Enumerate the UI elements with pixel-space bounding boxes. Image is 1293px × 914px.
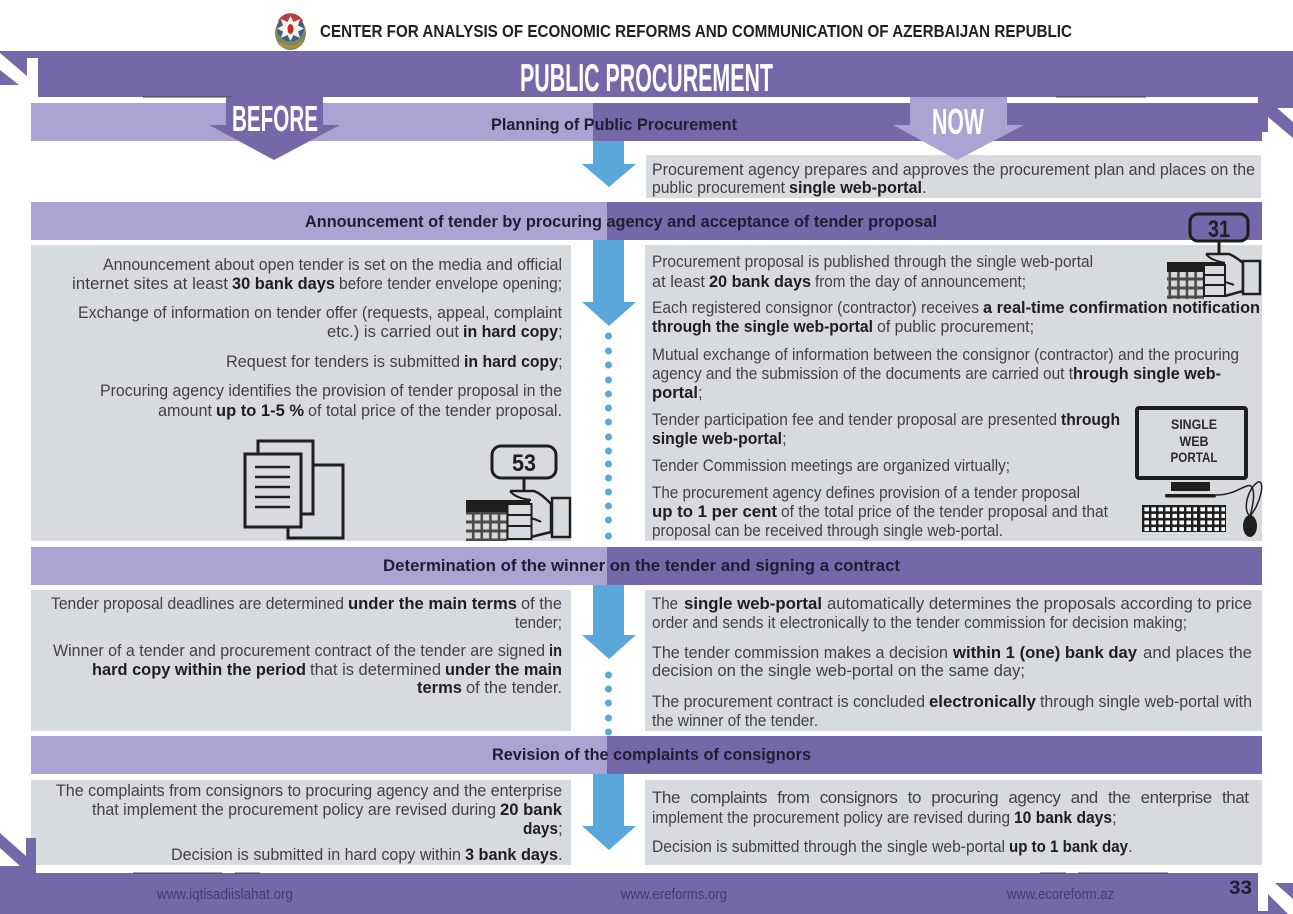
panel: announcement, now: Each registered consignor (contractor) receives — [652, 298, 979, 317]
panel: winner, now: and places the — [1143, 643, 1252, 662]
panel: announcement, now: through — [1061, 410, 1120, 429]
footer link: ereforms: www.ereforms.org — [620, 886, 727, 903]
panel: announcement, before — [31, 245, 571, 541]
panel: complaints, before: 20 bank — [500, 800, 563, 819]
panel: winner, before — [31, 590, 571, 731]
section bar: planning — [31, 103, 1262, 141]
panel: complaints, now — [645, 780, 1262, 865]
panel: announcement, before: Procuring agency identifies the provision of tender proposal in the — [100, 381, 562, 400]
section bar: announcement: Announcement of tender by procuring agency and acceptance of tender proposal — [305, 212, 937, 231]
panel: announcement, now — [645, 214, 1262, 541]
panel: announcement, now: portal — [652, 383, 698, 402]
panel: announcement, before: Request for tenders is submitted — [226, 352, 460, 371]
panel: announcement, now: through the single web-portal — [652, 317, 873, 336]
icon: computer labelled single web portal: PORTAL — [1170, 449, 1218, 465]
section bar: revision of complaints: Revision of the complaints of consignors — [492, 745, 811, 764]
corner mark: top right — [1258, 97, 1293, 138]
header: emblem and organisation name — [275, 13, 1072, 50]
panel: announcement, now: The procurement agency defines provision of a tender proposal — [652, 483, 1080, 502]
panel: complaints, before: The complaints from consignors to procuring agency and the enterprise — [56, 781, 562, 800]
panel: announcement, before: ; — [558, 352, 563, 371]
panel: announcement, now: Mutual exchange of information between the consignor (contractor) and the procuring — [652, 345, 1239, 364]
panel: winner, now: order and sends it electronically to the tender commission for decision making; — [652, 613, 1187, 632]
NOW arrow — [893, 97, 1024, 160]
section bar: determination of the winner — [31, 547, 1262, 585]
panel: complaints, now: . — [1128, 837, 1133, 856]
main title: PUBLIC PROCUREMENT — [520, 57, 773, 100]
panel: announcement, now: Tender participation fee and tender proposal are presented — [652, 410, 1057, 429]
panel: winner, now: electronically — [929, 692, 1037, 711]
icon: calendar and hand, 31 days — [1167, 214, 1260, 299]
blue arrow: planning — [582, 141, 636, 187]
panel: announcement, before: Announcement about open tender is set on the media and official — [103, 255, 562, 274]
panel: winner, before: terms — [417, 678, 462, 697]
corner mark: bottom right — [1258, 873, 1293, 914]
BEFORE arrow — [209, 97, 340, 160]
panel: winner, now: decision on the single web-portal on the same day; — [652, 661, 1025, 680]
panel: winner, now: The — [652, 594, 678, 613]
icon: computer labelled single web portal: WEB — [1180, 433, 1208, 449]
panel: announcement, now: 20 bank days — [709, 272, 811, 291]
panel: winner, before: Winner of a tender and procurement contract of the tender are signed — [53, 641, 545, 660]
panel: complaints, now: implement the procurement policy are revised during — [652, 808, 1010, 827]
panel: complaints, now: 10 bank days — [1014, 808, 1112, 827]
blue arrow: announcement — [582, 240, 636, 326]
panel: announcement, before: of total price of the tender proposal. — [308, 401, 562, 420]
panel: winner, now: automatically determines the proposals according to price — [827, 594, 1252, 613]
section bar: revision of complaints — [31, 736, 1262, 774]
panel: announcement, before: amount — [158, 401, 212, 420]
panel: announcement, now: from the day of announcement; — [815, 272, 1026, 291]
panel: announcement, before: in hard copy — [463, 322, 559, 341]
icon: calendar and hand, 53 days: 53 — [512, 450, 536, 477]
footer link: ecoreform: www.ecoreform.az — [1006, 886, 1114, 903]
panel: announcement, now: agency and the submission of the documents are carried out t — [652, 364, 1073, 383]
panel: announcement, now: up to 1 per cent — [652, 502, 777, 521]
panel: winner, before: of the — [521, 594, 562, 613]
panel: announcement, before: in hard copy — [464, 352, 558, 371]
dotted connector: winner — [605, 672, 612, 736]
icon: calendar and hand, 53 days — [466, 446, 570, 541]
panel: planning, now: public procurement — [652, 178, 785, 197]
page number: 33 — [1229, 878, 1252, 899]
panel: announcement, now: Tender Commission meetings are organized virtually; — [652, 456, 1010, 475]
NOW arrow: NOW — [932, 101, 984, 142]
panel: announcement, now: of public procurement; — [877, 317, 1034, 336]
BEFORE arrow: BEFORE — [232, 98, 318, 139]
panel: announcement, before: before tender envelope opening; — [339, 274, 562, 293]
panel: announcement, now: proposal can be received through single web-portal. — [652, 521, 1003, 540]
panel: announcement, now: hrough single web- — [1073, 364, 1221, 383]
panel: winner, before: that is determined — [310, 660, 441, 679]
blue arrow: complaints — [582, 774, 636, 850]
panel: planning, now — [646, 155, 1261, 198]
title banner — [0, 51, 1293, 100]
panel: announcement, before: internet sites at least — [72, 274, 228, 293]
panel: complaints, now: The complaints from consignors to procuring agency and the enterprise that — [652, 788, 1249, 807]
footer band — [0, 833, 1293, 914]
panel: complaints, now: up to 1 bank day — [1009, 837, 1128, 856]
panel: announcement, before: Exchange of information on tender offer (requests, appeal, complaint — [78, 303, 562, 322]
panel: announcement, now: ; — [782, 429, 787, 448]
panel: announcement, before: 30 bank days — [232, 274, 335, 293]
section bar: planning: Planning of Public Procurement — [491, 115, 737, 134]
panel: planning, now: Procurement agency prepares and approves the procurement plan and places on the — [652, 160, 1255, 179]
panel: winner, now: the winner of the tender. — [652, 711, 818, 730]
blue arrow: winner — [582, 585, 636, 659]
icon: calendar and hand, 31 days: 31 — [1208, 216, 1230, 243]
panel: planning, now: single web-portal — [789, 178, 922, 197]
panel: winner, before: tender; — [515, 613, 562, 632]
panel: complaints, before: that implement the procurement policy are revised during — [92, 800, 496, 819]
panel: winner, before: under the main — [445, 660, 562, 679]
panel: complaints, before: ; — [558, 819, 563, 838]
dotted connector: announcement — [605, 332, 612, 540]
corner mark: bottom left — [0, 833, 36, 874]
panel: announcement, now: Procurement proposal is published through the single web-portal — [652, 252, 1093, 271]
corner mark: top left — [0, 51, 38, 97]
panel: announcement, before: etc.) is carried out — [327, 322, 459, 341]
panel: announcement, now: at least — [652, 272, 705, 291]
panel: announcement, now: of the total price of the tender proposal and that — [781, 502, 1108, 521]
panel: announcement, now: a real-time confirmation notification — [983, 298, 1260, 317]
icon: computer labelled single web portal: SINGLE — [1171, 416, 1217, 432]
panel: winner, before: Tender proposal deadlines are determined — [51, 594, 344, 613]
panel: announcement, before: up to 1-5 % — [216, 401, 304, 420]
panel: winner, now: The tender commission makes a decision — [652, 643, 948, 662]
panel: winner, now: within 1 (one) bank day — [952, 643, 1138, 662]
icon: computer labelled single web portal — [1137, 408, 1262, 537]
panel: winner, now — [645, 590, 1262, 731]
panel: complaints, before: . — [558, 845, 563, 864]
panel: complaints, before — [31, 780, 571, 865]
panel: winner, before: of the tender. — [466, 678, 562, 697]
section bar: announcement — [31, 202, 1262, 240]
panel: winner, before: under the main terms — [348, 594, 517, 613]
panel: winner, now: single web-portal — [684, 594, 822, 613]
panel: winner, before: hard copy within the period — [92, 660, 306, 679]
panel: winner, before: in — [549, 641, 562, 660]
panel: complaints, now: ; — [1112, 808, 1117, 827]
panel: complaints, before: Decision is submitted in hard copy within — [171, 845, 461, 864]
panel: complaints, now: Decision is submitted through the single web-portal — [652, 837, 1005, 856]
icon: state emblem — [275, 13, 306, 50]
panel: announcement, now: single web-portal — [652, 429, 782, 448]
section bar: determination of the winner: Determination of the winner on the tender and signing a contract — [383, 556, 900, 575]
icon: stack of documents — [245, 441, 343, 538]
panel: announcement, now: ; — [698, 383, 703, 402]
panel: announcement, before: ; — [558, 322, 563, 341]
panel: winner, now: The procurement contract is concluded — [652, 692, 925, 711]
panel: complaints, before: 3 bank days — [465, 845, 558, 864]
panel: planning, now: . — [922, 178, 927, 197]
panel: winner, now: through single web-portal with — [1040, 692, 1252, 711]
panel: complaints, before: days — [523, 819, 558, 838]
footer link: iqtisadiislahat: www.iqtisadiislahat.org — [156, 886, 293, 903]
organisation name: CENTER FOR ANALYSIS OF ECONOMIC REFORMS AND COMMUNICATION OF AZERBAIJAN REPUBLIC — [320, 21, 1072, 41]
